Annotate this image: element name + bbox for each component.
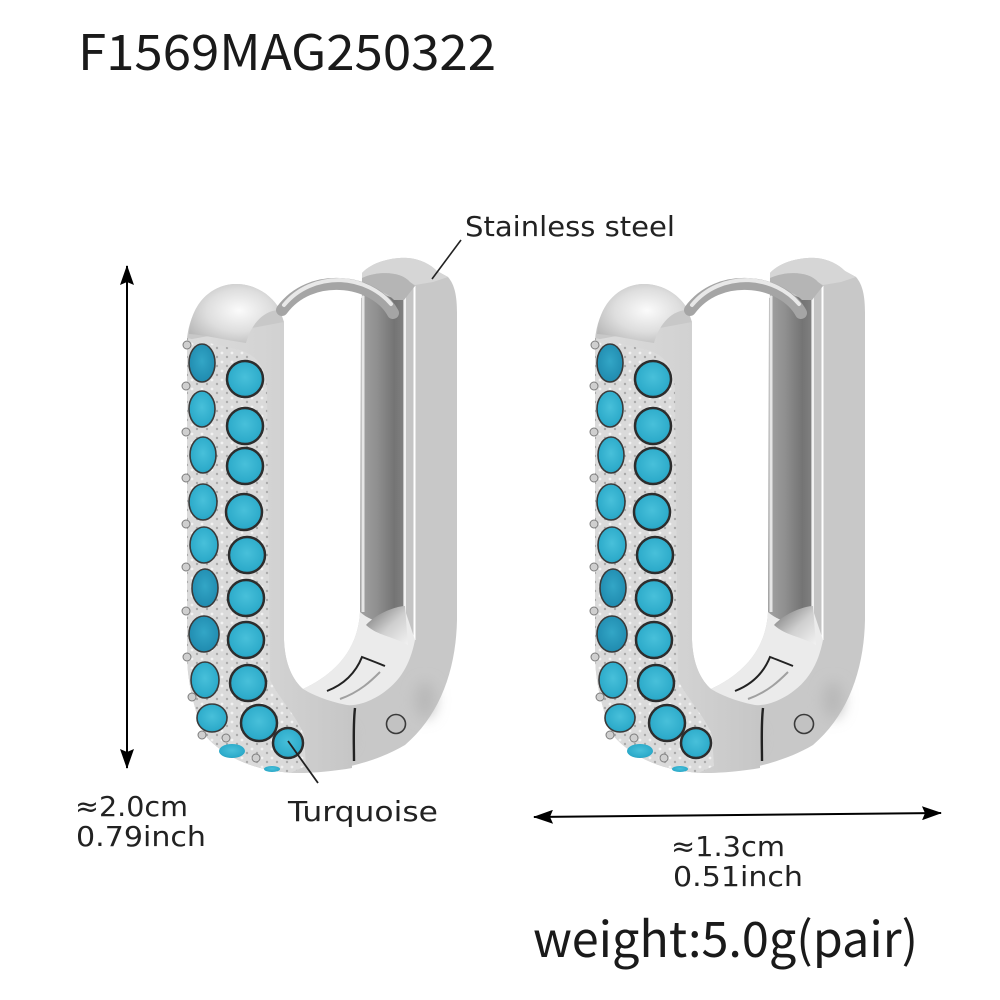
rear cap underside — [362, 273, 415, 300]
hinge seam — [354, 708, 355, 761]
height arrow — [126, 266, 128, 768]
lower band shading — [319, 682, 435, 750]
floor reflection — [366, 606, 408, 645]
width dimension text — [671, 830, 803, 893]
earring: right — [590, 258, 865, 773]
height dimension text — [75, 790, 206, 853]
channel inner wall strip — [403, 285, 415, 640]
height dimension text: 0.79inch — [76, 820, 206, 853]
height dimension text: ≈2.0cm — [75, 790, 188, 823]
wire hook — [282, 284, 393, 313]
label: stainless steel: Stainless steel — [465, 210, 675, 243]
turquoise stones: right column — [226, 361, 303, 758]
floor seam lines — [327, 657, 385, 691]
shiny inner base — [303, 610, 415, 705]
weight text: weight:5.0g(pair) — [533, 901, 918, 972]
rear cap — [362, 258, 448, 285]
lower edge stones — [219, 744, 280, 772]
leader line: stainless steel — [432, 240, 461, 279]
hinge pin — [386, 714, 406, 734]
label: turquoise: Turquoise — [287, 795, 438, 828]
front face — [187, 322, 352, 773]
pave setting — [187, 338, 306, 773]
leader line: turquoise — [288, 741, 318, 783]
title: product code: F1569MAG250322 — [78, 14, 496, 85]
width dimension text: ≈1.3cm — [671, 830, 785, 863]
inner channel — [360, 290, 403, 640]
dome cap — [189, 284, 280, 343]
earring: left — [182, 258, 457, 773]
silhouette — [187, 258, 457, 773]
turquoise stones: left column — [189, 344, 227, 732]
width arrow — [534, 813, 941, 817]
left edge prongs — [182, 341, 260, 762]
width dimension text: 0.51inch — [673, 860, 803, 893]
